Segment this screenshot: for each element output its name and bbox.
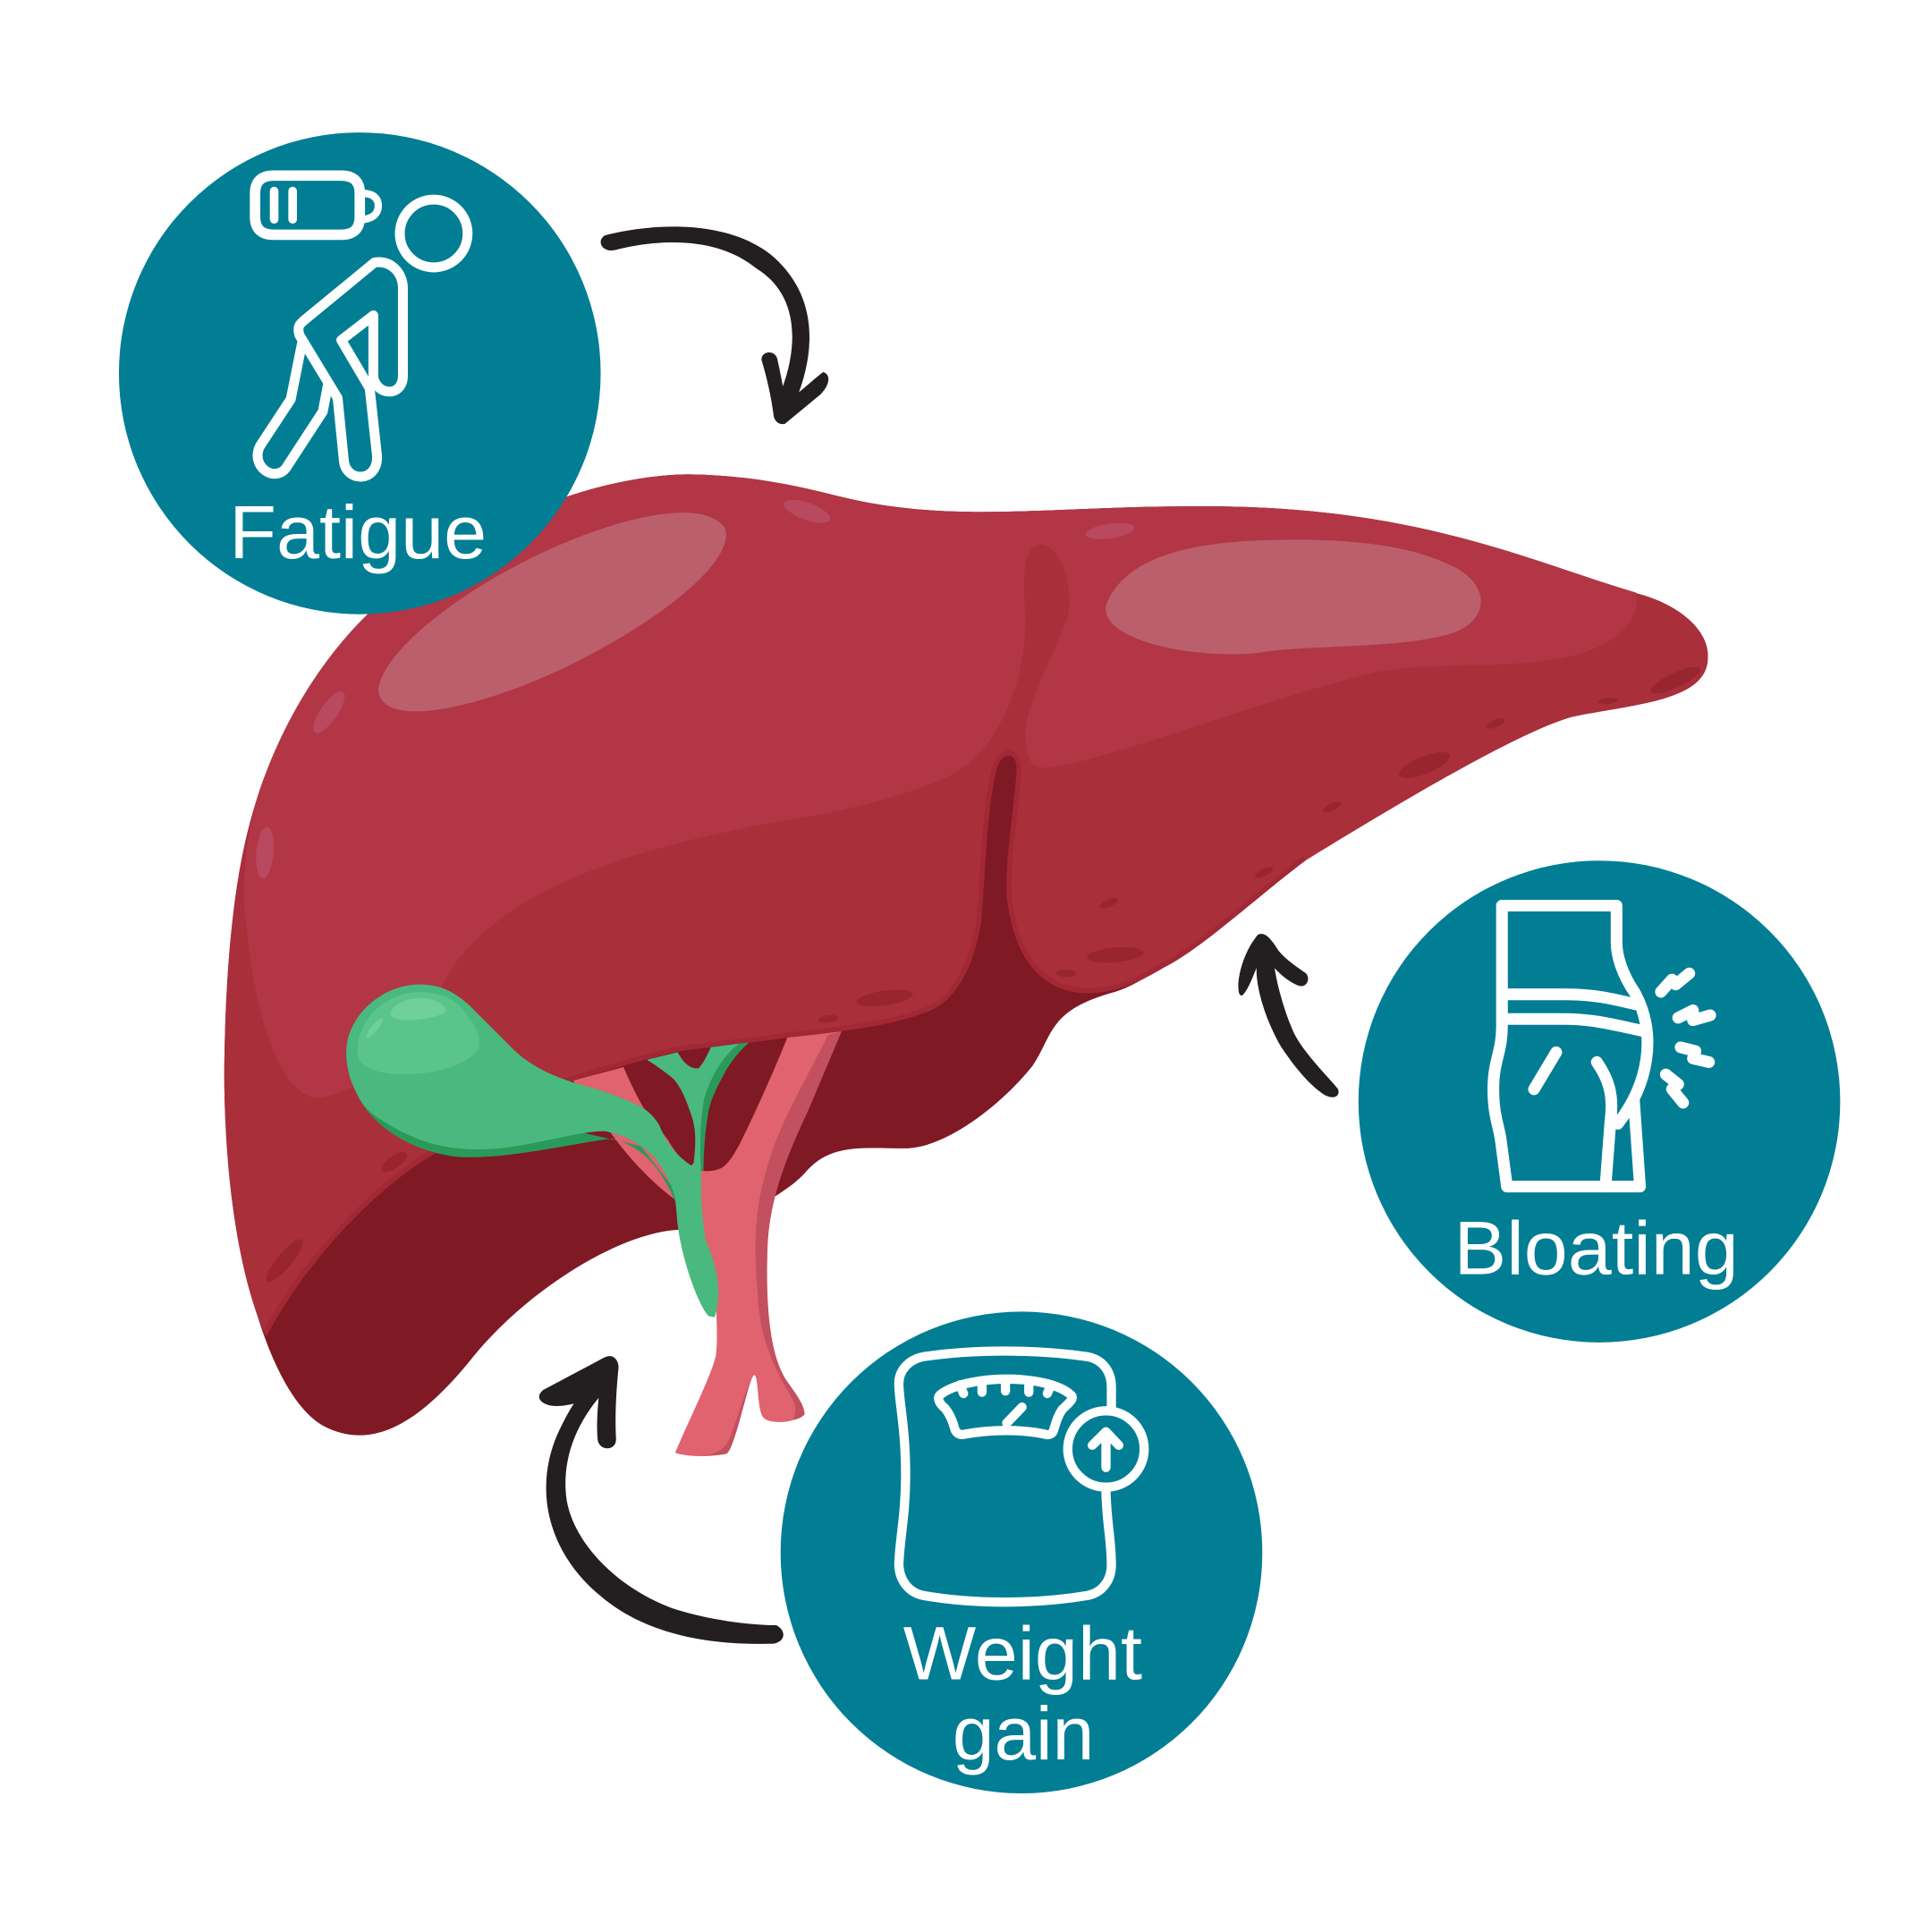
liver underside silhouette bbox=[225, 474, 1707, 1436]
lobe rim shading bbox=[789, 860, 1306, 1038]
surface spots bbox=[254, 495, 1703, 1286]
label line 2: gain bbox=[953, 1691, 1094, 1775]
arrow: fatigue to liver bbox=[601, 226, 828, 424]
icon: stooped figure bbox=[258, 262, 402, 477]
label: Bloating bbox=[1454, 1206, 1739, 1290]
liver light upper surface bbox=[244, 474, 1637, 1097]
icon: tired head bbox=[400, 199, 468, 267]
panel: weight gain bbox=[781, 1311, 1262, 1793]
upper right highlight bbox=[1106, 539, 1481, 654]
teal circle bbox=[781, 1311, 1262, 1793]
icon: bathroom scale bbox=[899, 1351, 1144, 1602]
panel: fatigue bbox=[119, 132, 601, 614]
label: Fatigue bbox=[229, 490, 487, 574]
arrow: bloating to liver bbox=[1238, 934, 1339, 1097]
teal circle bbox=[1359, 860, 1840, 1343]
icon: low battery bbox=[255, 175, 378, 234]
liver mid-tone lobes bbox=[225, 474, 1707, 1337]
teal circle bbox=[119, 132, 601, 614]
arrow: weight gain to liver bbox=[539, 1356, 784, 1644]
label line 1: Weight bbox=[903, 1612, 1142, 1696]
upper left highlight bbox=[378, 513, 726, 711]
gallbladder and bile duct bbox=[346, 985, 750, 1318]
icon: abdomen with pain bbox=[1494, 905, 1710, 1187]
panel: bloating bbox=[1359, 860, 1840, 1343]
liver illustration bbox=[225, 474, 1707, 1456]
portal vein bbox=[573, 1031, 842, 1456]
